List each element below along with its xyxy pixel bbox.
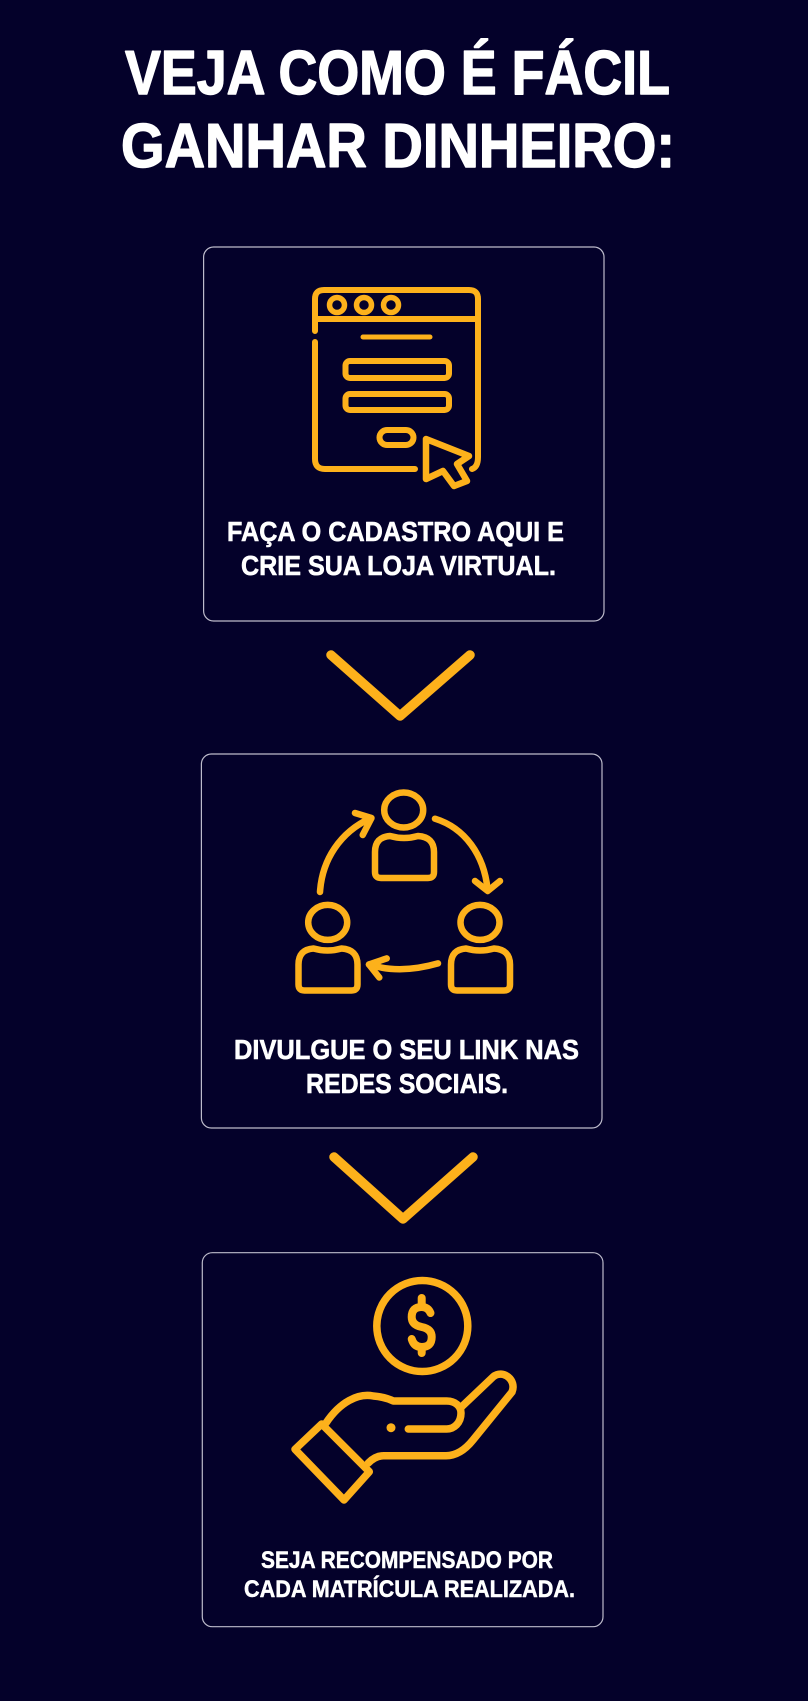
panel: step 2 share <box>201 754 602 1128</box>
title <box>121 39 675 181</box>
title: VEJA COMO É FÁCIL <box>125 39 670 108</box>
arrow: chevron 2 <box>334 1157 473 1219</box>
text: step 2: REDES SOCIAIS. <box>306 1068 508 1099</box>
title: GANHAR DINHEIRO: <box>121 112 675 181</box>
panel: step 3 reward <box>202 1253 603 1627</box>
text: step 2 <box>234 1034 579 1099</box>
panel: step 1 sign up <box>204 247 604 621</box>
icon: web form with cursor <box>315 290 478 486</box>
text: step 3: CADA MATRÍCULA REALIZADA. <box>244 1575 575 1603</box>
text: step 2: DIVULGUE O SEU LINK NAS <box>234 1034 579 1065</box>
arrow: chevron 1 <box>331 655 470 716</box>
text: step 1: FAÇA O CADASTRO AQUI E <box>227 516 564 547</box>
text: step 3: SEJA RECOMPENSADO POR <box>261 1547 553 1574</box>
icon: hand holding coin <box>295 1280 513 1500</box>
icon: three people with arrows <box>298 792 510 990</box>
text: step 1: CRIE SUA LOJA VIRTUAL. <box>241 550 556 581</box>
text: step 3 <box>244 1547 575 1603</box>
text: step 1 <box>227 516 564 581</box>
